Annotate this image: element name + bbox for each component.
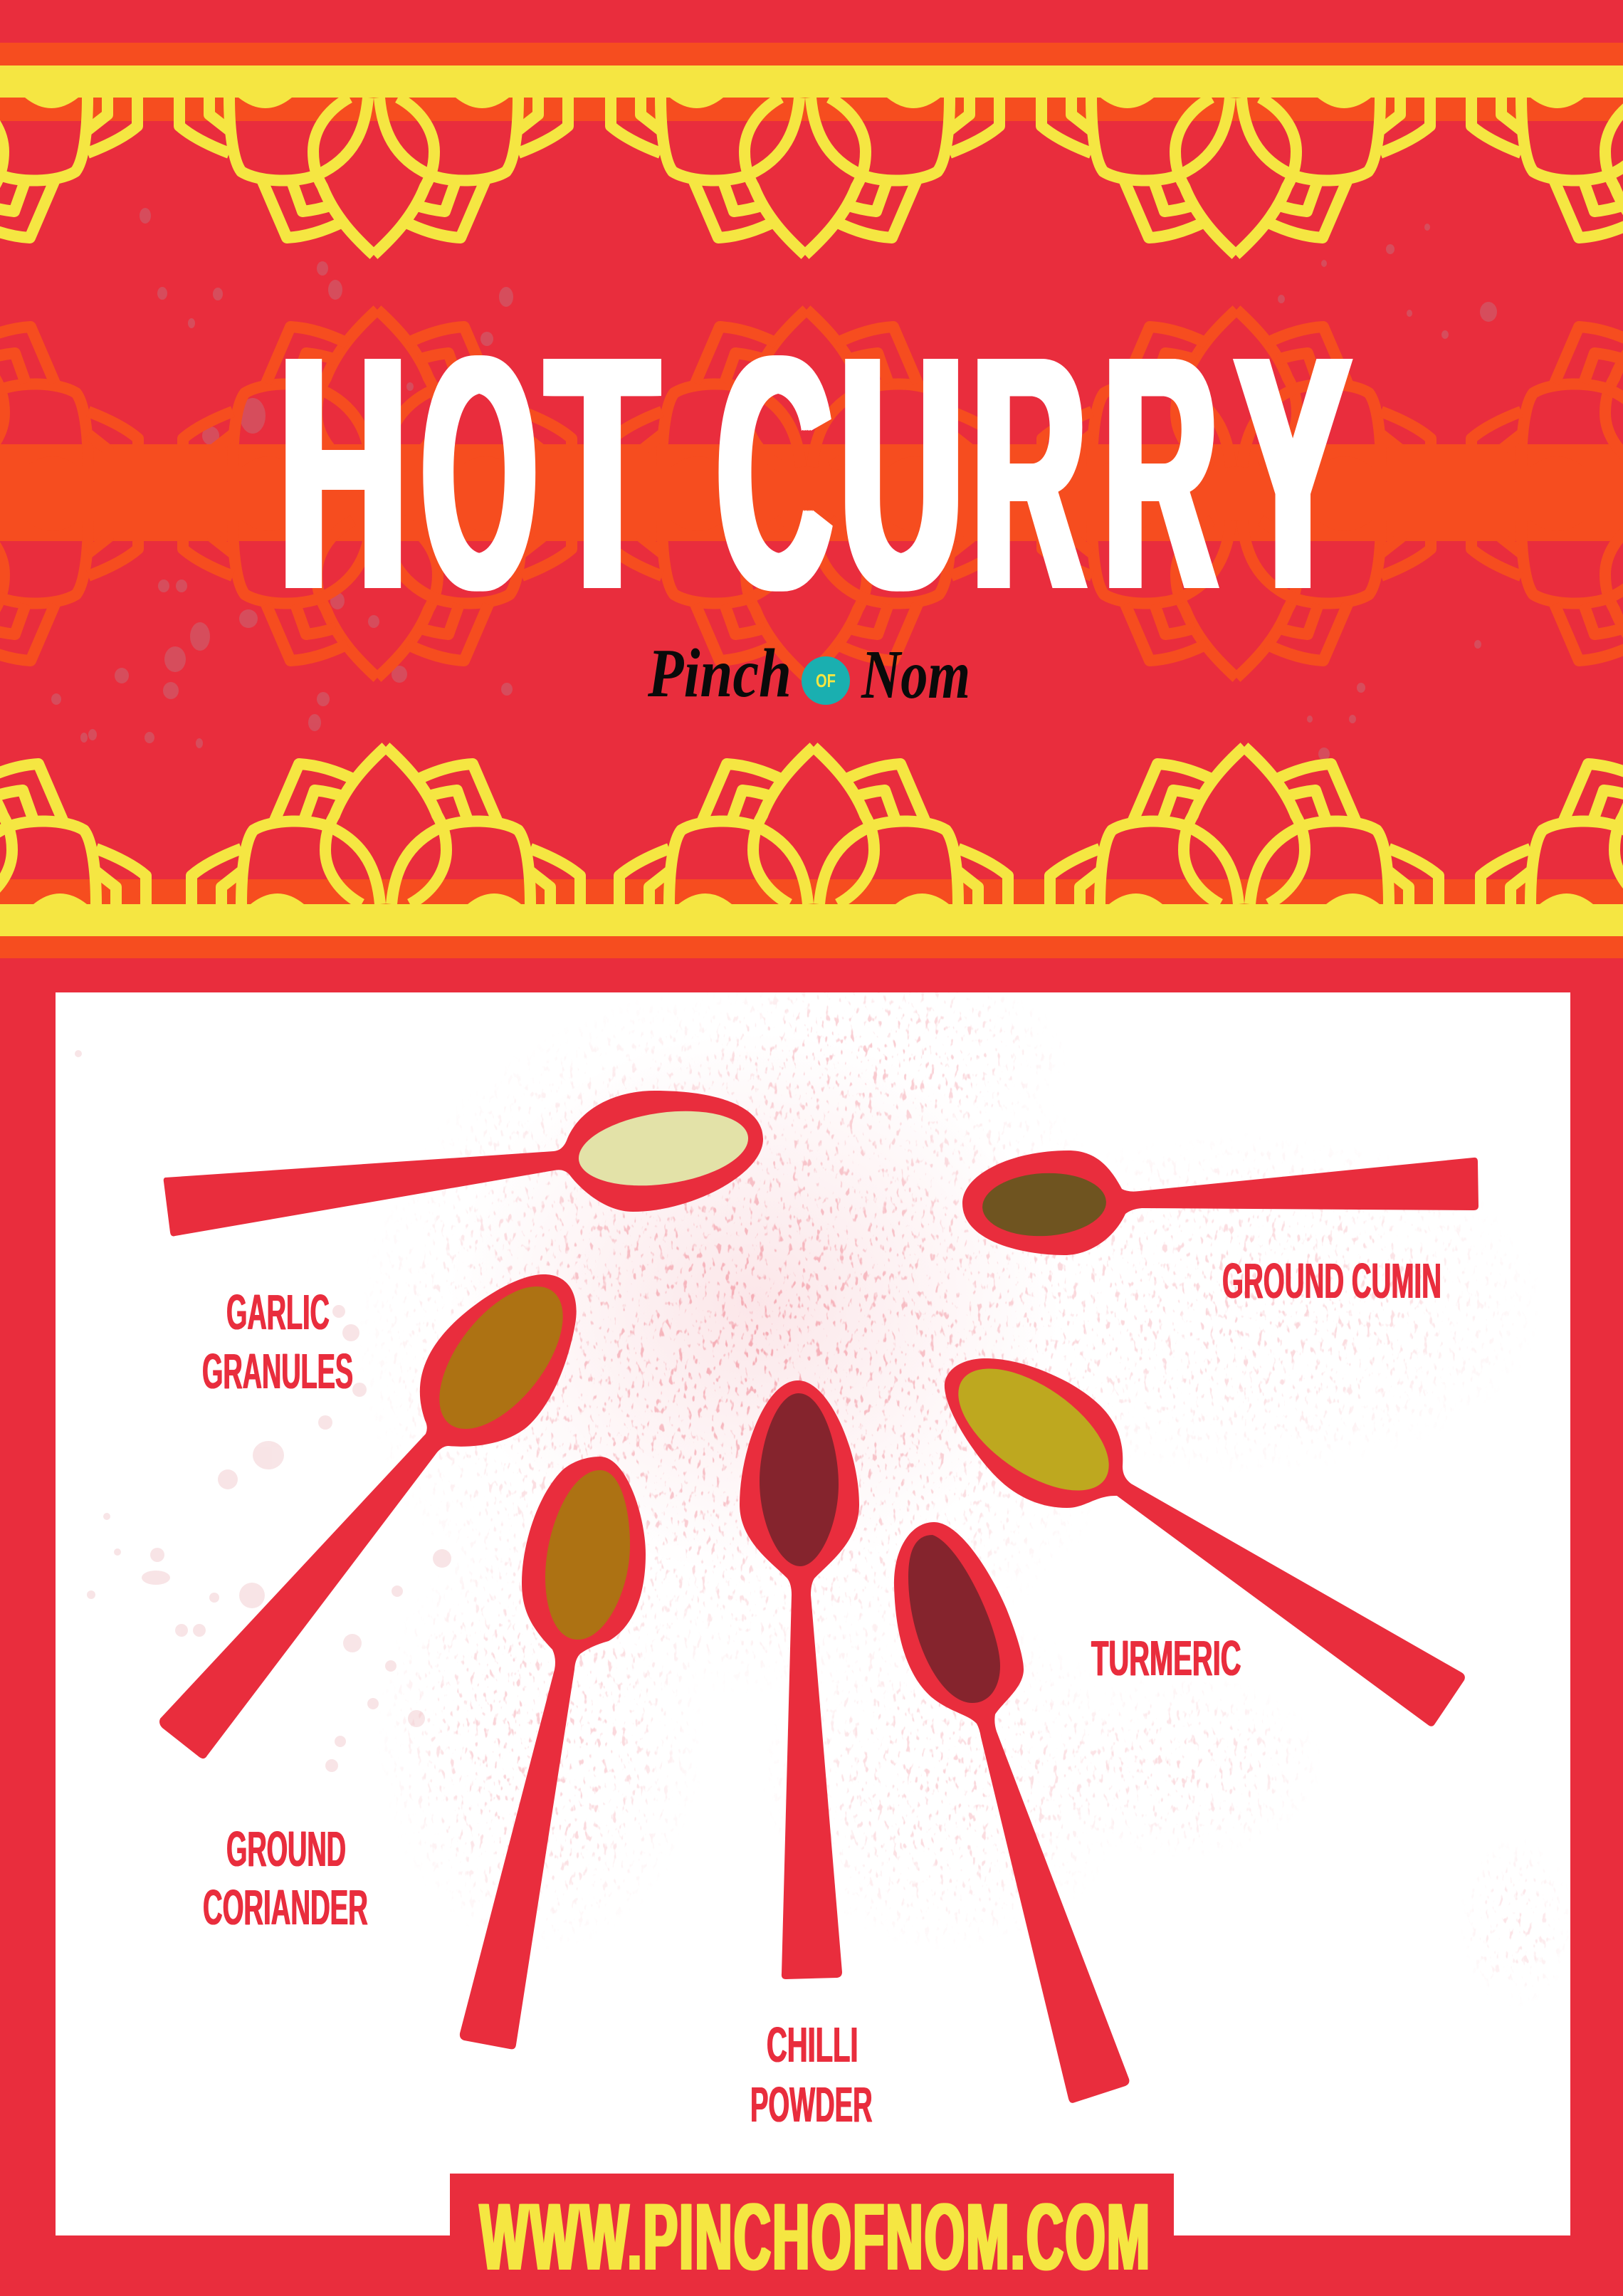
logo: Pinch of Nom: OF	[816, 670, 836, 691]
bottom yellow lotus border	[0, 747, 1623, 936]
top yellow lotus border	[0, 65, 1623, 255]
label: ground coriander: CORIANDER	[203, 1880, 368, 1935]
label: ground cumin: GROUND CUMIN	[1222, 1253, 1441, 1309]
panel: spices white card	[56, 992, 1570, 2235]
title: HOT CURRY: H	[279, 287, 407, 659]
spoon: ground cumin	[962, 1150, 1478, 1255]
title: HOT CURRY: R	[1103, 287, 1218, 659]
title: HOT CURRY: O	[421, 287, 537, 659]
spoon: turmeric	[938, 1345, 1465, 1726]
logo: Pinch of Nom: Nom	[861, 636, 970, 713]
label: ground coriander	[203, 1821, 368, 1935]
middle orange band	[0, 444, 1623, 541]
title: HOT CURRY: U	[840, 287, 963, 659]
label: turmeric: TURMERIC	[1091, 1630, 1241, 1686]
title: HOT CURRY	[279, 287, 1353, 659]
label: garlic granules	[202, 1284, 353, 1399]
pale paint blobs	[75, 1050, 451, 1772]
title: HOT CURRY: C	[717, 287, 832, 659]
middle orange lotus pattern	[0, 310, 1623, 678]
header background bands	[0, 43, 1623, 958]
spoon: chilli powder (centre)	[740, 1380, 859, 1979]
label: chilli powder: POWDER	[750, 2077, 873, 2132]
title: HOT CURRY: R	[972, 287, 1086, 659]
title: HOT CURRY: Y	[1235, 287, 1350, 659]
label: chilli powder	[750, 2017, 873, 2132]
spoon: brown spice (upper left)	[159, 1265, 587, 1758]
spoon: chilli powder (right)	[894, 1522, 1129, 2103]
soft pink dust glow	[448, 1032, 1061, 1573]
label: garlic granules: GRANULES	[202, 1343, 353, 1399]
logo: Pinch of Nom: Pinch	[647, 635, 792, 712]
spoon: garlic granules	[164, 1091, 763, 1236]
label: ground coriander: GROUND	[226, 1821, 346, 1877]
title: HOT CURRY: T	[547, 287, 658, 659]
spice dust splatter	[392, 992, 1558, 1986]
website url: WWW.PINCHOFNOM.COM	[480, 2184, 1151, 2290]
website tab	[450, 2174, 1174, 2296]
spoon: brown spice (lower left)	[460, 1457, 646, 2049]
label: chilli powder: CHILLI	[767, 2017, 858, 2072]
logo: Pinch of Nom	[647, 635, 970, 713]
label: garlic granules: GARLIC	[226, 1284, 330, 1340]
header paint speckle	[51, 208, 1497, 760]
